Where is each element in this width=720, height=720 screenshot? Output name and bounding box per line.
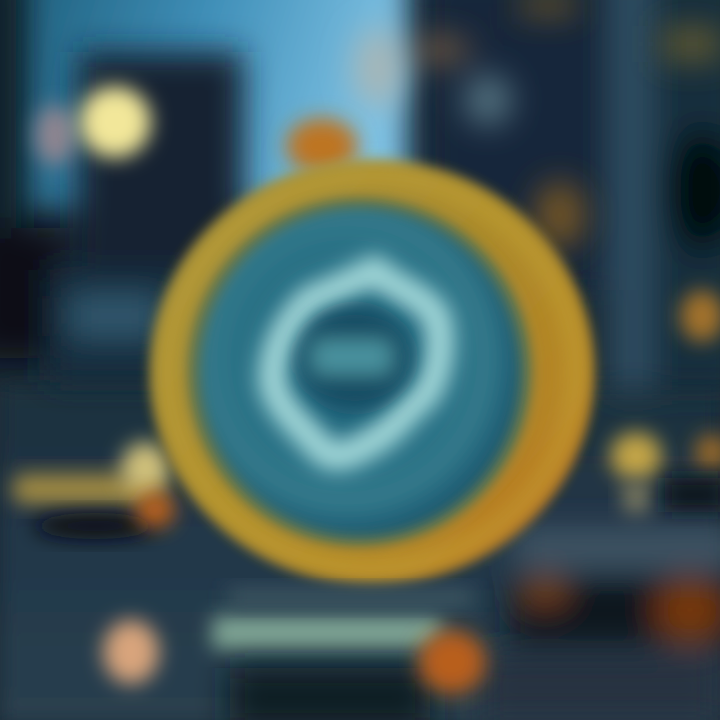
coin base (212, 588, 473, 720)
city lights behind the coin (354, 0, 720, 249)
lights on the right (610, 290, 720, 516)
coin rim highlight (168, 176, 576, 568)
coin rim (150, 160, 594, 584)
left gold bar (12, 442, 175, 539)
right dark buildings (425, 0, 720, 390)
coin face (200, 208, 520, 536)
peach light on floor (103, 620, 159, 684)
moon (35, 86, 151, 165)
emblem ring (273, 270, 440, 456)
orange glow at base (418, 630, 486, 694)
right ledge and dark orange shapes (480, 530, 720, 720)
left dark building (0, 0, 243, 380)
gold coin (150, 160, 594, 584)
sky (25, 0, 410, 210)
orange knob on coin (286, 118, 358, 174)
emblem core (299, 308, 411, 408)
coin inner bevel (188, 198, 532, 546)
